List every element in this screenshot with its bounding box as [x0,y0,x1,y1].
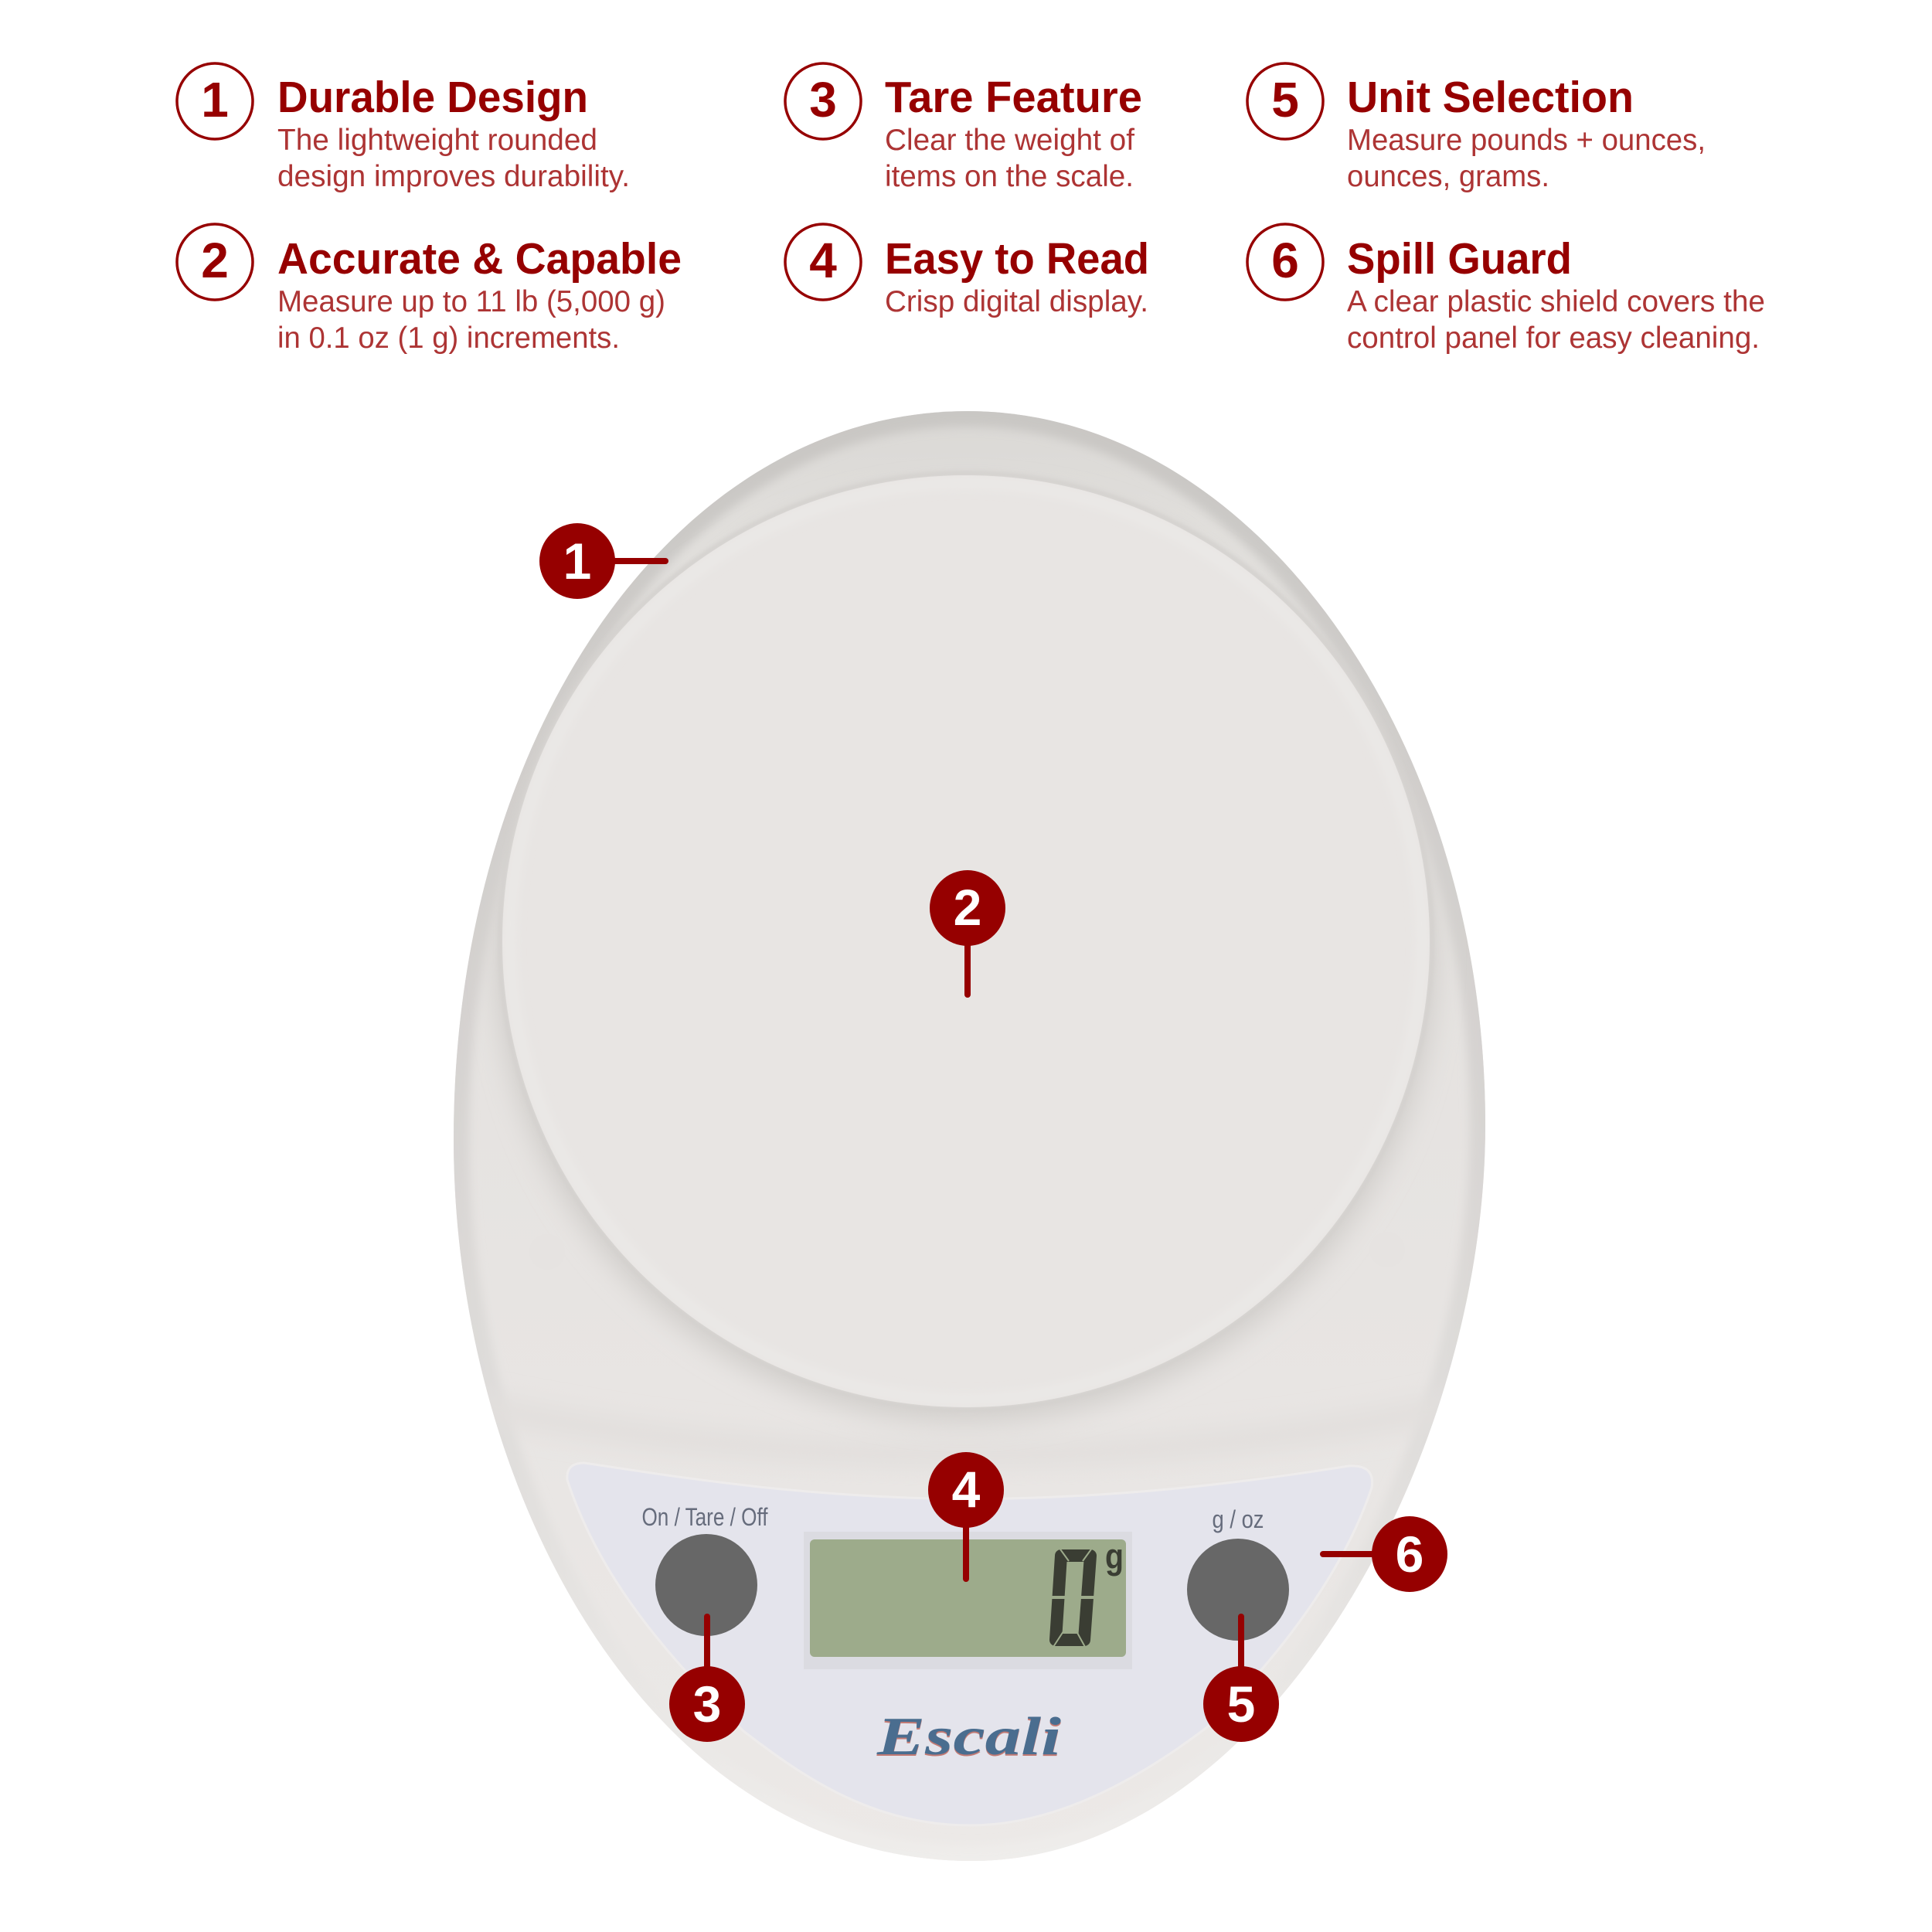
legend item 1: Durable Design: Durable Design [277,73,588,122]
callout 6: 6 [1396,1526,1423,1583]
weighing platform [502,475,1430,1407]
legend item 1: Durable Design: design improves durability. [277,160,630,193]
legend item 3: Tare Feature: Tare Feature [885,73,1142,122]
legend item 4: Easy to Read: Crisp digital display. [885,285,1148,318]
legend item 6: Spill Guard: Spill Guard [1347,234,1572,284]
callout 4: 4 [952,1461,981,1518]
callout 1 [539,523,665,599]
legend item 5: Unit Selection [1247,63,1706,193]
legend item 1: Durable Design: The lightweight rounded [277,124,597,157]
legend item 6: Spill Guard: 6 [1271,233,1299,288]
scale body [454,411,1485,1861]
callout 5: 5 [1227,1675,1255,1733]
legend item 3: Tare Feature: 3 [809,72,837,128]
button label: On / Tare / Off: On / Tare / Off [641,1503,768,1531]
legend item 5: Unit Selection: Unit Selection [1347,73,1634,122]
callout 3 [669,1617,745,1742]
legend item 6: Spill Guard [1247,224,1765,355]
legend item 3: Tare Feature [785,63,1142,193]
legend item 3: Tare Feature: items on the scale. [885,160,1134,193]
LCD digit 0 [1045,1547,1099,1647]
legend item 3: Tare Feature: Clear the weight of [885,124,1134,157]
brand logo: Escali [876,1707,1062,1767]
legend item 2: Accurate & Capable: Accurate & Capable [277,234,682,284]
legend item 4: Easy to Read: 4 [809,233,837,288]
legend item 2: Accurate & Capable: Measure up to 11 lb (5,000 g) [277,285,665,318]
legend item 6: Spill Guard: A clear plastic shield covers the [1347,285,1765,318]
legend item 2: Accurate & Capable [177,224,682,355]
legend: feature list [177,63,1765,355]
callout 2 [930,870,1005,995]
callout 1: 1 [563,532,591,590]
legend item 2: Accurate & Capable: in 0.1 oz (1 g) increments. [277,321,620,355]
legend item 5: Unit Selection: Measure pounds + ounces, [1347,124,1706,157]
legend item 5: Unit Selection: ounces, grams. [1347,160,1549,193]
callout 2: 2 [954,879,981,936]
callout 6 [1323,1516,1447,1592]
callout 5 [1203,1617,1279,1742]
callout 3: 3 [693,1675,721,1733]
LCD display [804,1532,1132,1669]
button label: g / oz: g / oz [1212,1505,1264,1533]
legend item 5: Unit Selection: 5 [1271,72,1299,128]
legend item 1: Durable Design: 1 [201,72,229,128]
control panel [567,1463,1372,1825]
callout 4 [928,1452,1004,1579]
brand logo: Escali [876,1709,1062,1768]
legend item 1: Durable Design [177,63,630,193]
legend item 4: Easy to Read: Easy to Read [885,234,1149,284]
LCD unit g: g [1105,1536,1124,1577]
kitchen scale illustration [454,411,1485,1861]
right button [1187,1539,1289,1641]
left button [655,1534,757,1636]
legend item 4: Easy to Read [785,224,1149,318]
legend item 2: Accurate & Capable: 2 [201,233,229,288]
legend item 6: Spill Guard: control panel for easy cleaning. [1347,321,1760,355]
